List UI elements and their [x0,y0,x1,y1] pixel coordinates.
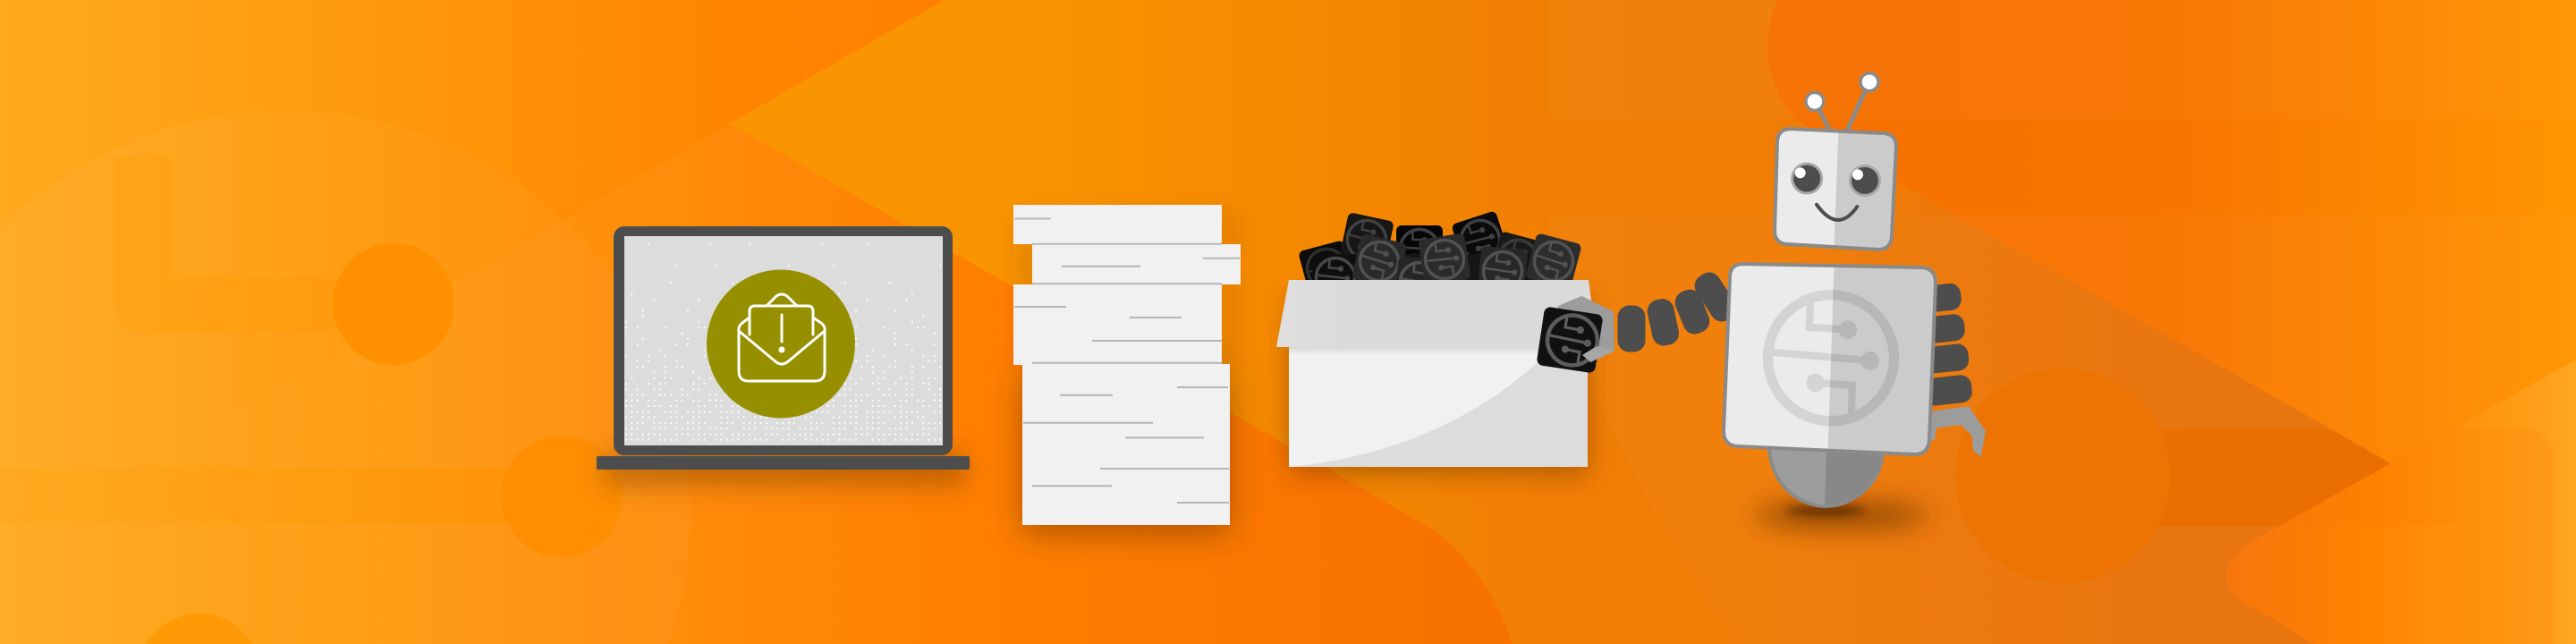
paper stack [1013,205,1241,534]
laptop [597,226,970,486]
sheet 1 [1013,205,1222,244]
box front shaded curve [1289,340,1588,467]
box flap [1276,280,1597,347]
sheet 2 [1032,244,1241,284]
robot arm segments [1617,268,1741,352]
laptop screen [624,236,943,445]
robot back leg limb [1928,406,1986,457]
robot hand holding token [1536,296,1614,374]
text lines on sheets [1014,218,1240,503]
robot ground shadow [1753,500,1928,530]
box front [1289,340,1588,467]
robot fingers [1920,283,1973,407]
tokens pile [1298,210,1582,308]
laptop base [597,456,970,470]
box of tokens [1276,210,1597,474]
robot wheel [1769,447,1883,506]
icon: open envelope with alert [739,294,825,381]
robot smile [1817,205,1857,220]
robot thumb [1582,346,1614,362]
screen dot matrix [626,243,942,440]
sheet 4 [1022,364,1230,525]
robot antennae [1806,73,1878,131]
laptop bezel [614,226,953,455]
robot [1536,73,1986,530]
chest circuit logo [1766,293,1896,423]
robot chest [1724,264,1936,454]
sheet 3 [1013,284,1222,365]
olive alert circle [707,270,855,419]
held token [1536,306,1604,374]
robot head [1775,129,1896,250]
robot eyes [1792,164,1880,195]
